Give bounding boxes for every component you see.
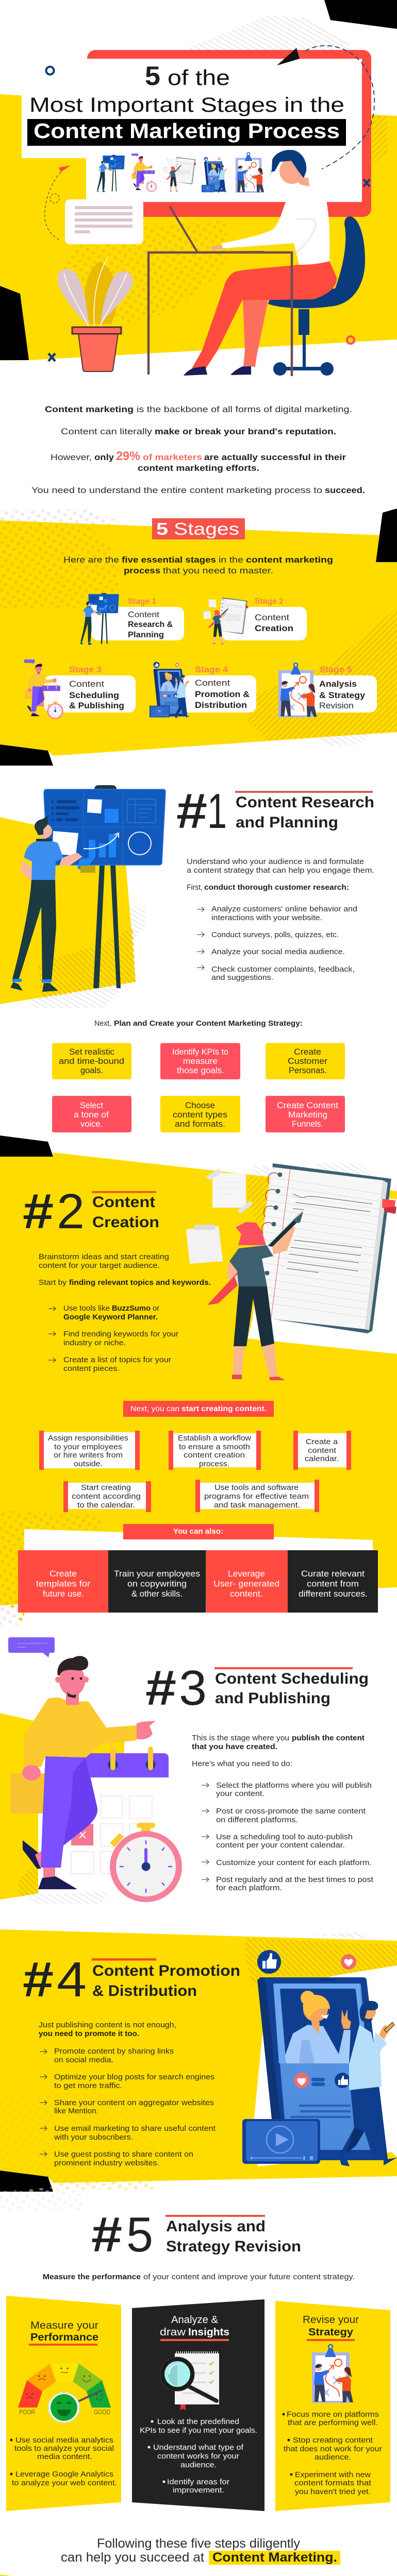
black corner shape: [0, 286, 29, 360]
you can also table: templates for: [36, 1579, 90, 1589]
stages intro text: Here are the: [63, 555, 119, 565]
illustration 5: strategy clipboard: [312, 2345, 353, 2403]
stage 1 card: Content: [128, 611, 160, 619]
section 2 heading: [23, 1184, 159, 1239]
section 2 heading: #: [23, 1184, 54, 1239]
panel: measure your performance: [6, 2296, 121, 2511]
panel: revise your strategy: audience.: [315, 2453, 351, 2462]
section 3 intro: that you have created.: [192, 1742, 277, 1751]
section 4 heading: #: [23, 1952, 54, 2007]
section 1 intro: Understand who your audience is and formulate: [187, 857, 364, 866]
stage 2 card: Content: [255, 613, 289, 622]
title: Content Marketing Process: [34, 119, 340, 143]
stages intro text: [63, 555, 333, 575]
section 3 bullet list: for each platform.: [216, 1884, 282, 1892]
section 3 bullet list: Customize your content for each platform.: [216, 1858, 372, 1867]
5 stages heading badge: 5: [156, 519, 168, 538]
section 5 intro: [43, 2273, 355, 2281]
section 1 bullet list: Check customer complaints, feedback,: [211, 965, 355, 974]
creation cards: content: [308, 1446, 337, 1455]
stage 1 card: Research &: [128, 620, 173, 629]
stage 4 card: Stage 4: [195, 665, 228, 674]
section 1 heading: #: [176, 784, 207, 839]
strategy boxes: Create Content: [277, 1101, 338, 1110]
you can also table: future use.: [43, 1589, 84, 1599]
section 1 bullet list: Analyze customers' online behavior and: [211, 905, 357, 913]
hero person at desk: [147, 150, 365, 376]
stages intro text: five essential stages: [122, 555, 216, 565]
panel: revise your strategy: you haven't tried yet.: [295, 2488, 371, 2496]
creation cards: Create a: [306, 1437, 338, 1446]
stage 4 card: Distribution: [195, 700, 247, 710]
strategy boxes: Funnels.: [292, 1120, 323, 1129]
section 3 intro: Here's what you need to do:: [192, 1759, 292, 1768]
section 3 heading: Content Scheduling: [215, 1670, 369, 1687]
strategy boxes: and time-bound: [59, 1057, 124, 1066]
section 2 intro: Brainstorm ideas and start creating: [39, 1252, 169, 1261]
section 2 bullet list: Google Keyword Planner.: [63, 1313, 158, 1321]
strategy boxes: voice.: [80, 1120, 103, 1129]
creation cards: content according: [72, 1492, 141, 1501]
creation cards: calendar.: [305, 1454, 339, 1463]
section 3 intro: publish the content: [292, 1734, 365, 1742]
paper plane black with dashed path: [277, 46, 374, 169]
panel: measure your performance: Performance: [30, 2332, 98, 2343]
section 1 bullet list: Conduct surveys, polls, quizzes, etc.: [211, 930, 339, 939]
panel: measure your performance: to analyze your web content.: [12, 2479, 117, 2487]
you can also table: & other skills.: [131, 1589, 183, 1599]
creation cards: content creation: [184, 1451, 245, 1460]
creation cards: to your employees: [54, 1443, 122, 1451]
section 1 bullet list: [197, 905, 357, 982]
stage 3 card: [24, 659, 136, 719]
section 3 intro: This is the stage where you: [192, 1734, 289, 1742]
panel: analyze and draw insights: Insights: [188, 2327, 229, 2338]
panel: measure your performance: Leverage Google Analytics: [15, 2470, 113, 2479]
you can also table: You can also:: [173, 1527, 223, 1536]
section 2 heading: 2: [57, 1184, 85, 1239]
5 stages heading badge: [152, 518, 245, 539]
section 2 background: [0, 1136, 397, 1625]
panel: revise your strategy: Revise your: [303, 2314, 359, 2326]
panel: analyze and draw insights: Analyze &: [171, 2314, 219, 2326]
banner: next start creating: Next, you can: [130, 1404, 179, 1413]
strategy intro line: Next,: [94, 1019, 111, 1028]
stage 5 card: Analysis: [319, 679, 357, 689]
stages background: [0, 509, 397, 766]
banner: next start creating: start creating content.: [181, 1404, 267, 1413]
creation cards: Start creating: [81, 1483, 131, 1492]
creation cards: to the calendar.: [77, 1501, 135, 1510]
section 4 bullet list: on social media.: [54, 2056, 113, 2064]
section 2 intro: Start by: [39, 1278, 67, 1287]
section 4 background: [0, 1929, 397, 2210]
section 5 intro: Measure the performance: [43, 2273, 141, 2281]
stage 5 card: [278, 663, 377, 717]
section 1 heading: and Planning: [236, 814, 338, 831]
panel: revise your strategy: Stop creating content: [293, 2436, 373, 2445]
section 1 heading: [176, 784, 374, 839]
section 4 bullet list: to get more traffic.: [54, 2081, 122, 2090]
5 stages heading badge: Stages: [174, 519, 239, 538]
stages intro text: content marketing: [246, 555, 333, 565]
section 4 heading: [23, 1952, 240, 2007]
creation cards: process.: [199, 1460, 229, 1468]
section 1 intro: conduct thorough customer research:: [204, 883, 349, 892]
stages intro text: in the: [219, 555, 243, 565]
gauge chart: GOOD: [94, 2408, 110, 2416]
section 3 heading: 3: [179, 1660, 207, 1716]
panel: revise your strategy: Strategy: [308, 2327, 354, 2338]
section 4 bullet list: Use email marketing to share useful content: [54, 2124, 216, 2133]
section 3 bullet list: content per your content calendar.: [216, 1841, 345, 1850]
panel: revise your strategy: content formats that: [294, 2479, 371, 2487]
creation cards: Establish a workflow: [178, 1434, 251, 1443]
stage 5 card: & Strategy: [319, 690, 366, 700]
stage 1 card: [80, 593, 184, 645]
you can also table: User- generated: [213, 1579, 279, 1589]
stage 1 card: Stage 1: [128, 597, 156, 606]
intro text: Content marketing: [45, 404, 134, 414]
closing statement: Following these five steps diligently: [97, 2536, 300, 2551]
section 1 bullet list: and suggestions.: [211, 973, 273, 982]
red paper plane with dashed path: [45, 165, 71, 241]
intro text: only: [94, 452, 114, 462]
section 4 bullet list: like Mention.: [54, 2107, 98, 2115]
section 1 intro: a content strategy that can help you engage them.: [187, 866, 374, 875]
creation cards: Use tools and software: [214, 1483, 299, 1492]
section 1 heading: 1: [207, 784, 227, 839]
panel: revise your strategy: Experiment with new: [295, 2471, 371, 2479]
illustration 4: phone and people: [242, 1950, 397, 2166]
decorative ring blue: [46, 67, 54, 74]
section 3 bullet list: your content.: [216, 1789, 264, 1798]
strategy boxes: those goals.: [177, 1066, 224, 1075]
panel: analyze and draw insights: audience.: [180, 2461, 217, 2469]
stage 2 card: Creation: [255, 623, 293, 633]
banner: next start creating: [123, 1401, 274, 1417]
section 4 intro: [39, 2021, 176, 2038]
intro text: Content can literally: [61, 427, 153, 436]
plant in pot: [57, 259, 133, 371]
section 3 background: [0, 1713, 124, 1904]
section 2 intro: finding relevant topics and keywords.: [69, 1278, 211, 1287]
section 3 intro: [192, 1734, 365, 1768]
strategy boxes: goals.: [80, 1066, 103, 1075]
creation cards: [39, 1431, 351, 1512]
section 1 bullet list: Analyze your social media audience.: [211, 947, 345, 956]
title: 5: [145, 61, 160, 91]
section 2 bullet list: Use tools like: [63, 1304, 110, 1313]
section 2 heading: Creation: [92, 1214, 159, 1231]
panel: analyze and draw insights: KPIs to see if you met your goals.: [140, 2427, 257, 2435]
illustration 1: strategy board: [10, 785, 166, 992]
creation cards: Assign responsibilities: [48, 1434, 128, 1443]
panel: analyze and draw insights: Identify areas for: [167, 2478, 229, 2486]
creation cards: outside.: [74, 1460, 103, 1468]
you can also table: content from: [307, 1579, 359, 1589]
panel: measure your performance: Measure your: [30, 2320, 98, 2331]
section 4 intro: you need to promote it too.: [39, 2029, 139, 2038]
section 2 bullet list: or: [153, 1304, 159, 1313]
section 3 heading: and Publishing: [215, 1690, 330, 1707]
section 1 bullet list: interactions with your website.: [211, 913, 322, 922]
panel: measure your performance: tools to analyze your social: [14, 2445, 114, 2453]
strategy boxes: Create: [294, 1047, 321, 1057]
panel: revise your strategy: [275, 2301, 390, 2511]
section 4 bullet list: [40, 2047, 216, 2167]
closing statement: Content Marketing.: [212, 2550, 337, 2565]
section 2 bullet list: BuzzSumo: [112, 1304, 151, 1313]
section 1 intro: [187, 857, 374, 892]
intro text: However,: [51, 452, 92, 462]
section 4 intro: Just publishing content is not enough,: [39, 2021, 176, 2029]
you can also table: [18, 1524, 378, 1613]
section 2 heading: Content: [92, 1194, 155, 1211]
strategy boxes: Personas.: [289, 1066, 327, 1075]
intro text: content marketing efforts.: [138, 463, 259, 473]
section 3 heading: [145, 1660, 369, 1716]
stage 5 card: Revision: [319, 701, 354, 710]
stage 2 card: [203, 597, 307, 644]
section 4 bullet list: prominent industry websites.: [54, 2159, 159, 2167]
stage 3 card: Content: [69, 679, 104, 689]
intro text: You need to understand the entire content marketing process to: [31, 485, 322, 495]
title: of the: [168, 65, 230, 90]
intro text: is the backbone of all forms of digital marketing.: [137, 404, 352, 414]
section 3 bullet list: Select the platforms where you will publish: [216, 1781, 372, 1790]
closing statement: can help you succeed at: [61, 2550, 204, 2565]
strategy boxes: Choose: [185, 1101, 215, 1110]
closing statement: [61, 2536, 340, 2565]
panel: analyze and draw insights: Understand what type of: [153, 2444, 244, 2452]
section 4 bullet list: Share your content on aggregator websites: [54, 2098, 214, 2107]
section 4 heading: & Distribution: [92, 1982, 197, 1999]
decorative marks: [48, 179, 370, 361]
panel: measure your performance: media content.: [37, 2453, 92, 2461]
stage 1 card: Planning: [128, 631, 164, 639]
illustration 3: scheduling person with calendar: [8, 1637, 182, 1902]
stage 3 card: Stage 3: [69, 665, 102, 674]
panel: measure your performance: Use social media analytics: [15, 2436, 113, 2445]
strategy boxes: a tone of: [74, 1110, 109, 1120]
stages intro text: process: [124, 566, 160, 575]
stage 4 card: Content: [195, 678, 230, 688]
panel: revise your strategy: that are performing well.: [288, 2419, 378, 2427]
section 2 bullet list: content pieces.: [63, 1364, 120, 1373]
section 3 bullet list: Use a scheduling tool to auto-publish: [216, 1833, 353, 1841]
panel: revise your strategy: that does not work for your: [284, 2445, 382, 2453]
strategy boxes: Identify KPIs to: [172, 1047, 228, 1057]
strategy boxes: Set realistic: [69, 1047, 114, 1057]
intro text: [31, 404, 365, 495]
you can also table: Curate relevant: [301, 1569, 365, 1579]
illustration 2: notebook writing: [186, 1163, 396, 1380]
stage 4 card: Promotion &: [195, 689, 250, 699]
strategy boxes: content types: [173, 1110, 227, 1120]
section 3 bullet list: [202, 1781, 374, 1892]
section 4 bullet list: Optimize your blog posts for search engines: [54, 2073, 214, 2081]
panel: revise your strategy: Focus more on platforms: [287, 2411, 379, 2419]
intro text: of marketers: [143, 452, 202, 462]
you can also table: content.: [230, 1589, 263, 1599]
creation cards: or hire writers from: [54, 1451, 123, 1460]
header mini icons: [97, 152, 264, 193]
section 4 bullet list: Promote content by sharing links: [54, 2047, 174, 2056]
panel: analyze and draw insights: [132, 2299, 264, 2511]
you can also table: Train your employees: [114, 1569, 200, 1579]
strategy boxes: and formats.: [175, 1120, 225, 1129]
stage 3 card: & Publishing: [69, 701, 124, 710]
section 2 bullet list: Create a list of topics for your: [63, 1355, 171, 1364]
strategy boxes: Select: [80, 1101, 103, 1110]
stage 5 card: Stage 5: [319, 665, 352, 674]
panel: analyze and draw insights: Look at the predefined: [157, 2418, 239, 2426]
title: [27, 61, 346, 146]
you can also table: Leverage: [228, 1569, 265, 1579]
panel: analyze and draw insights: content works for your: [157, 2452, 239, 2461]
section 5 heading: Strategy Revision: [166, 2238, 301, 2255]
stage 4 card: [150, 662, 256, 718]
strategy boxes: measure: [183, 1057, 218, 1066]
stages intro text: that you need to master.: [163, 566, 273, 575]
section 3 bullet list: Post or cross-promote the same content: [216, 1807, 366, 1816]
section 3 heading: #: [145, 1660, 176, 1716]
strategy intro line: Plan and Create your Content Marketing Strategy:: [114, 1019, 303, 1028]
note card: [65, 199, 143, 244]
stage 2 card: Stage 2: [255, 597, 284, 606]
footer: [0, 2574, 397, 2576]
section 5 heading: [91, 2207, 301, 2262]
section 2 bullet list: Find trending keywords for your: [63, 1330, 178, 1338]
section 5 intro: of your content and improve your future content strategy.: [143, 2273, 355, 2281]
section 4 bullet list: with your subscribers.: [54, 2133, 133, 2142]
intro text: make or break your brand's reputation.: [155, 427, 336, 436]
section 1 background: [0, 817, 145, 1008]
strategy boxes: [52, 1043, 345, 1132]
section 5 heading: #: [91, 2207, 122, 2262]
you can also table: on copywriting: [127, 1579, 187, 1589]
gauge chart: POOR: [19, 2408, 35, 2416]
section 1 intro: First,: [187, 883, 203, 892]
title: Most Important Stages in the: [29, 94, 344, 116]
hero red frame: [22, 50, 371, 217]
you can also table: Create: [49, 1569, 77, 1579]
section 2 bullet list: industry or niche.: [63, 1338, 126, 1347]
panel: analyze and draw insights: draw: [160, 2327, 186, 2338]
creation cards: programs for effective team: [204, 1492, 309, 1501]
hero background: [0, 0, 397, 361]
intro text: succeed.: [325, 485, 365, 495]
section 5 heading: Analysis and: [166, 2218, 266, 2235]
you can also table: different sources.: [299, 1589, 368, 1599]
section 2 intro: content for your target audience.: [39, 1261, 160, 1270]
section 3 bullet list: Post regularly and at the best times to post: [216, 1875, 374, 1884]
section 2 intro: [39, 1252, 211, 1287]
gauge chart: [18, 2363, 111, 2422]
stage 3 card: Scheduling: [69, 690, 119, 700]
icon: magnifier over checklist: [160, 2352, 219, 2411]
panel: analyze and draw insights: improvement.: [173, 2486, 224, 2495]
intro text: are actually successful in their: [204, 452, 346, 462]
creation cards: to ensure a smooth: [179, 1443, 250, 1451]
strategy boxes: Customer: [288, 1057, 328, 1066]
section 3 bullet list: on different platforms.: [216, 1816, 298, 1824]
intro text: 29%: [116, 449, 140, 463]
section 4 bullet list: Use guest posting to share content on: [54, 2150, 193, 2159]
section 5 heading: 5: [126, 2207, 153, 2262]
strategy boxes: Marketing: [288, 1110, 327, 1120]
section 1 heading: Content Research: [236, 794, 374, 811]
creation cards: and task management.: [214, 1501, 300, 1510]
section 4 heading: 4: [57, 1952, 87, 2007]
section 4 heading: Content Promotion: [92, 1962, 240, 1979]
section 2 bullet list: [48, 1304, 178, 1373]
